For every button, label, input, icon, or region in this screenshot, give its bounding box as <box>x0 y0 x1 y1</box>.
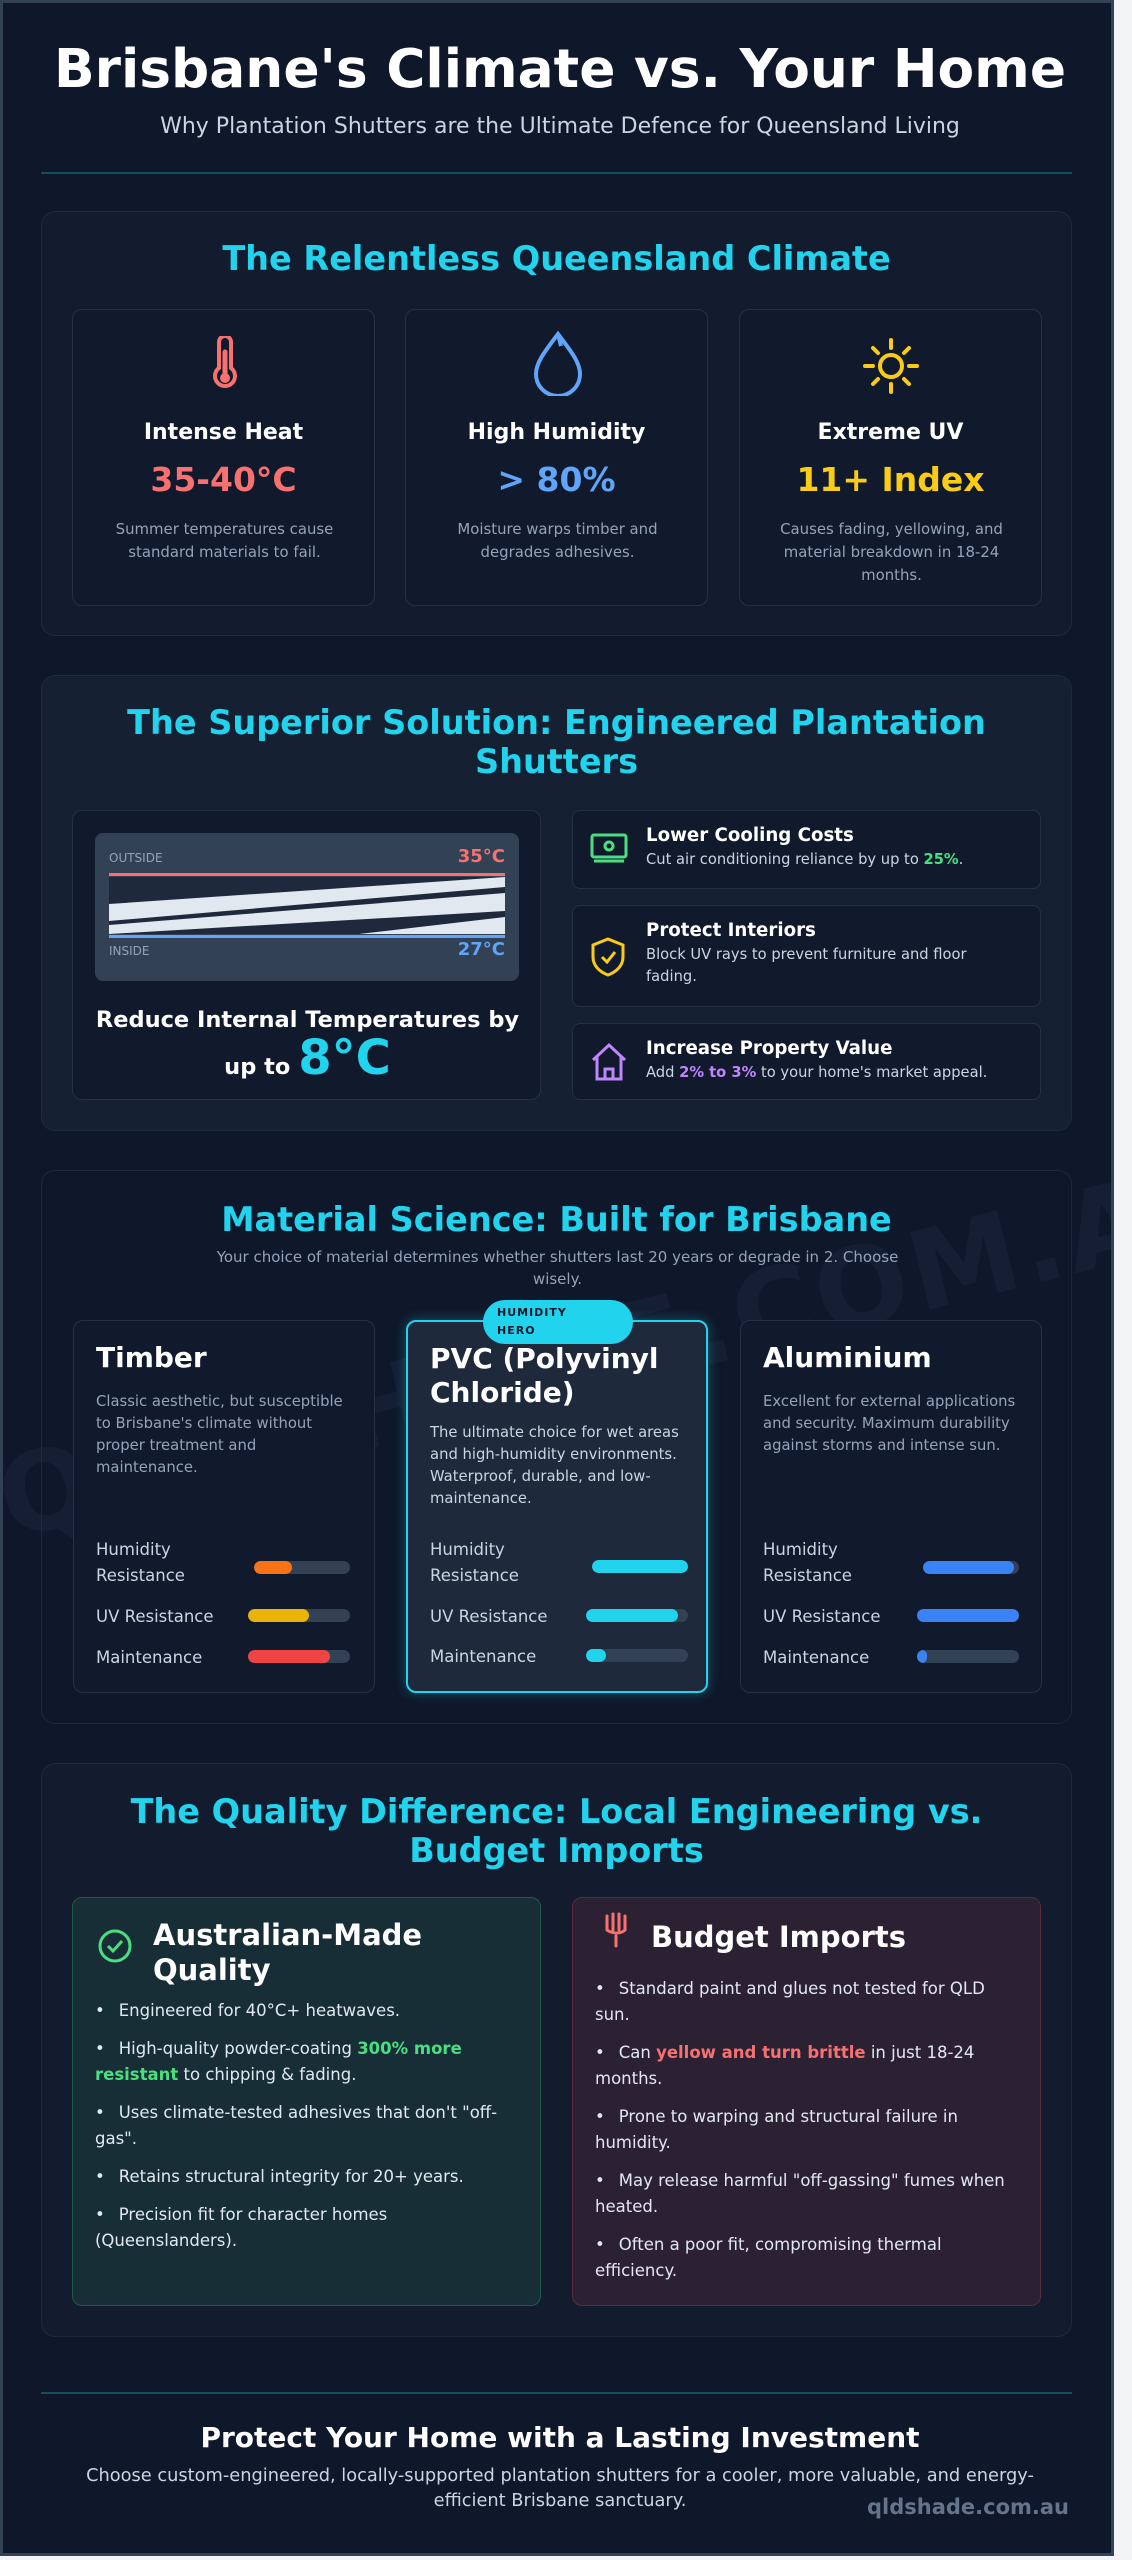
subtitle: materials: Your choice of material determines whether shutters last 20 years or degrade in 2. Choose wisely. <box>217 1248 898 1288</box>
benefit: cooling: Lower Cooling Costs <box>646 825 854 846</box>
card: uv: Causes fading, yellowing, and material breakdown in 18-24 months. <box>780 520 1003 584</box>
material: timber: Timber <box>96 1341 207 1374</box>
box: australian made: Australian-Made <box>153 1918 422 1952</box>
box: budget imports: Often a poor fit, compromising thermal efficiency. <box>595 2235 942 2280</box>
card: uv: 11+ Index <box>796 460 985 499</box>
box: budget imports: May release harmful "off-gassing" fumes when heated. <box>595 2171 1005 2216</box>
benefit: interiors: Block UV rays to prevent furniture and floor fading. <box>646 946 967 985</box>
material: aluminium: Excellent for external applications and security. Maximum durability against storms and intense sun. <box>763 1393 1015 1454</box>
title: Brisbane's Climate vs. Your Home <box>54 37 1066 100</box>
card: uv: Extreme UV <box>818 420 963 445</box>
card: humidity: Moisture warps timber and degrades adhesives. <box>457 520 658 561</box>
badge: humidity hero <box>483 1300 633 1344</box>
material: timber: Humidity <box>96 1540 171 1559</box>
benefit: cooling: Cut air conditioning reliance by up to 25%. <box>646 851 963 868</box>
card: uv <box>739 309 1042 606</box>
box: budget imports: Can yellow and turn brittle in just 18-24 months. <box>595 2043 974 2088</box>
heading: climate: The Relentless Queensland Climate <box>222 239 891 278</box>
material: pvc: The ultimate choice for wet areas and high-humidity environments. Waterproof, durable, and low-maintenance. <box>430 1424 679 1507</box>
panel: quality <box>41 1763 1072 2337</box>
subtitle: Why Plantation Shutters are the Ultimate Defence for Queensland Living <box>160 114 960 139</box>
icon: house <box>592 1043 626 1080</box>
material: timber: Resistance <box>96 1566 185 1585</box>
material: pvc <box>406 1320 708 1693</box>
card: heat <box>72 309 375 606</box>
material: timber: Maintenance <box>96 1648 202 1667</box>
material: pvc: Humidity <box>430 1540 505 1559</box>
material: aluminium: Maintenance <box>763 1648 869 1667</box>
material: aluminium: Humidity <box>763 1540 838 1559</box>
callout: 8°C <box>96 1007 519 1086</box>
icon: thumbs down <box>605 1912 627 1948</box>
panel: solution <box>41 675 1072 1131</box>
box: budget imports: Standard paint and glues not tested for QLD sun. <box>595 1979 985 2024</box>
material: timber: Classic aesthetic, but susceptible to Brisbane's climate without proper treatment and maintenance. <box>96 1393 343 1476</box>
icon: shield <box>592 937 624 977</box>
benefit: cooling <box>572 810 1041 889</box>
icon: money <box>590 834 628 862</box>
card: heat: 35-40°C <box>150 460 297 499</box>
card: humidity: > 80% <box>497 460 616 499</box>
panel: materials <box>41 1170 1072 1724</box>
box: australian made: Precision fit for character homes (Queenslanders). <box>95 2205 387 2250</box>
callout: 8°C: up to 8°C <box>224 1030 391 1086</box>
benefit: value: Increase Property Value <box>646 1038 892 1059</box>
brand: qldshade.com.au <box>867 2495 1069 2519</box>
shutter diagram: OUTSIDE <box>109 851 163 865</box>
card: heat: Intense Heat <box>144 420 303 445</box>
box: australian made: High-quality powder-coating 300% more resistant to chipping & fading. <box>95 2039 462 2084</box>
callout: 8°C: Reduce Internal Temperatures by <box>96 1007 519 1033</box>
heading: quality: The Quality Difference: Local Engineering vs. Budget Imports <box>131 1792 982 1870</box>
box: budget imports: Budget Imports <box>651 1920 906 1954</box>
box: budget imports <box>572 1897 1041 2306</box>
shutter diagram: 35°C <box>458 846 505 867</box>
shutter diagram: INSIDE <box>109 944 150 958</box>
box: australian made: Uses climate-tested adhesives that don't "off-gas". <box>95 2103 497 2148</box>
material: timber: UV Resistance <box>96 1607 214 1626</box>
benefit: value: Add 2% to 3% to your home's market appeal. <box>646 1064 987 1081</box>
card: humidity <box>405 309 708 606</box>
heading: solution: The Superior Solution: Engineered Plantation Shutters <box>127 703 986 781</box>
panel: climate <box>41 211 1072 636</box>
temperature box <box>72 810 541 1100</box>
material: pvc: UV Resistance <box>430 1607 548 1626</box>
icon: thermometer <box>213 336 237 388</box>
benefit: interiors <box>572 905 1041 1007</box>
card: heat: Summer temperatures cause standard materials to fail. <box>116 520 333 561</box>
footer text: Choose custom-engineered, locally-supported plantation shutters for a cooler, more valuable, and energy-efficient Brisbane sanctuary. <box>86 2465 1034 2511</box>
material: pvc: PVC (Polyvinyl Chloride) <box>430 1342 659 1409</box>
icon: water drop <box>534 330 582 396</box>
box: australian made: Retains structural integrity for 20+ years. <box>119 2167 464 2186</box>
material: timber <box>73 1320 375 1693</box>
footer heading: Protect Your Home with a Lasting Investment <box>200 2421 920 2454</box>
card: humidity: High Humidity <box>468 420 645 445</box>
box: australian made: Engineered for 40°C+ heatwaves. <box>119 2001 400 2020</box>
material: aluminium: Resistance <box>763 1566 852 1585</box>
box: budget imports: Prone to warping and structural failure in humidity. <box>595 2107 958 2152</box>
heading: materials: Material Science: Built for Brisbane <box>221 1200 892 1239</box>
shutter diagram: 27°C <box>458 939 505 960</box>
benefit: interiors: Protect Interiors <box>646 920 816 941</box>
shutter diagram <box>95 833 519 981</box>
material: pvc: Resistance <box>430 1566 519 1585</box>
material: aluminium: UV Resistance <box>763 1607 881 1626</box>
badge: humidity hero: HERO <box>497 1324 536 1337</box>
box: australian made: Quality <box>153 1953 271 1987</box>
icon: sun <box>863 338 919 394</box>
material: aluminium: Aluminium <box>763 1341 932 1374</box>
material: pvc: Maintenance <box>430 1647 536 1666</box>
benefit: value <box>572 1023 1041 1100</box>
badge: humidity hero: HUMIDITY <box>497 1306 567 1319</box>
icon: check circle <box>98 1930 132 1962</box>
material: aluminium <box>740 1320 1042 1693</box>
box: australian made <box>72 1897 541 2306</box>
